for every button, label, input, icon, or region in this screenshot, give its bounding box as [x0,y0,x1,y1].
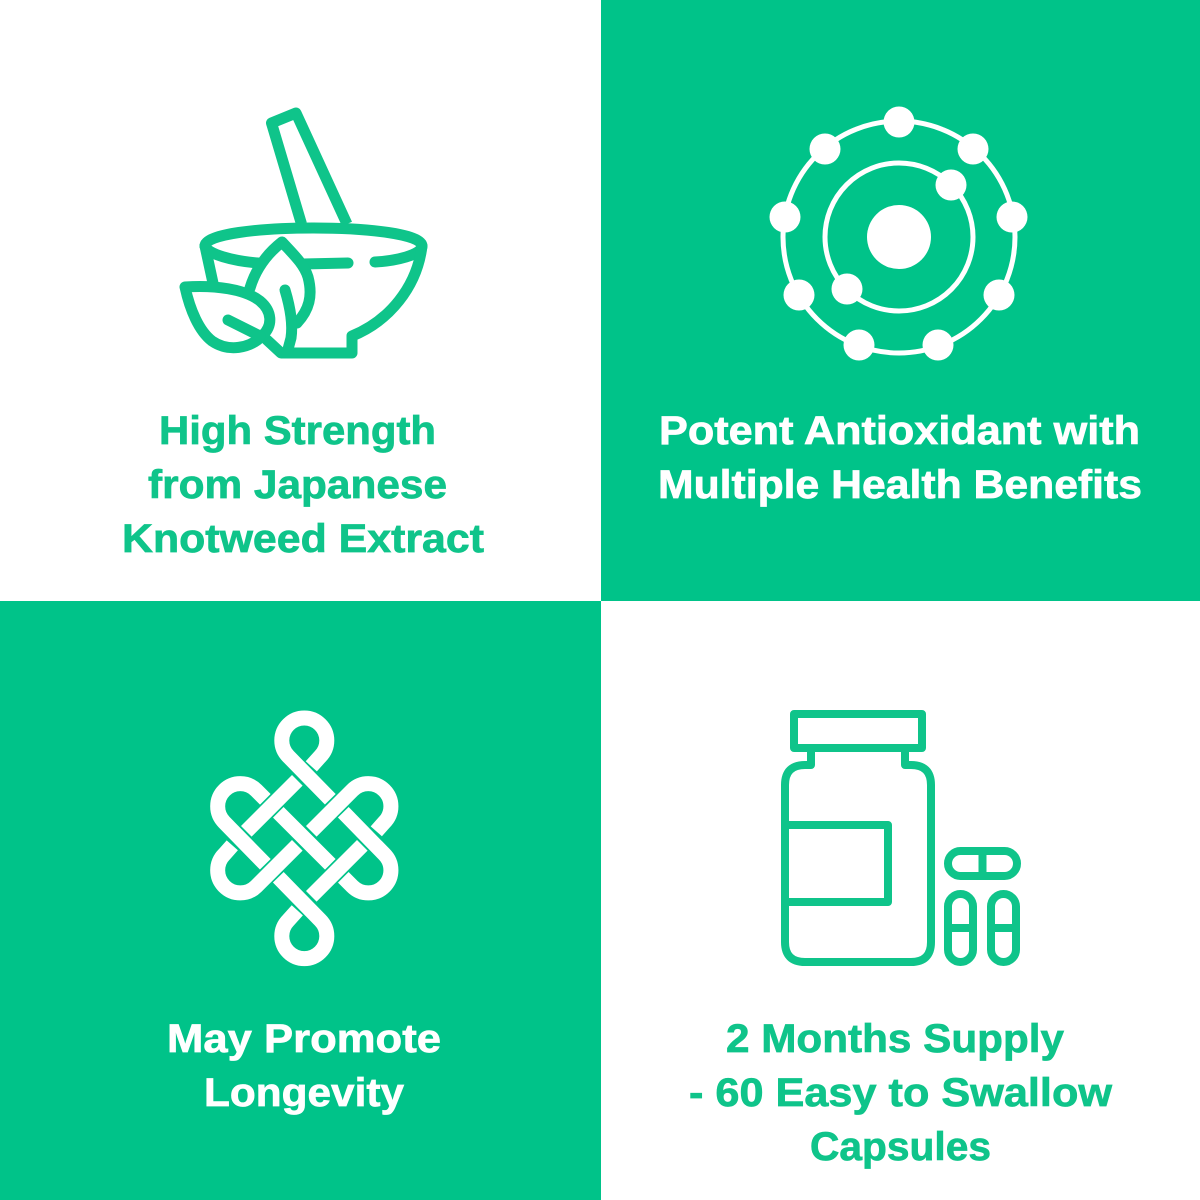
heading: supply [689,1017,1113,1169]
heading: longevity [167,1017,441,1115]
icon: bottle and capsules [785,714,1017,962]
heading: high strength [122,409,484,561]
icon: mortar, pestle and leaves [185,113,422,353]
heading: antioxidant: Multiple Health Benefits [658,463,1142,507]
panel: high strength [0,0,601,601]
heading: antioxidant [658,409,1142,507]
icon: atom [770,106,1028,360]
icon: endless knot [218,718,391,959]
heading: antioxidant: Potent Antioxidant with [659,409,1140,453]
panel: supply [601,601,1200,1200]
heading: supply: 2 Months Supply [726,1017,1065,1061]
heading: high strength: Knotweed Extract [122,517,484,561]
panel: longevity [0,601,601,1200]
heading: supply: - 60 Easy to Swallow [689,1071,1113,1115]
heading: longevity: May Promote [167,1017,441,1061]
heading: high strength: High Strength [159,409,436,453]
heading: longevity: Longevity [204,1071,405,1115]
heading: high strength: from Japanese [148,463,447,507]
heading: supply: Capsules [810,1125,991,1169]
panel: antioxidant [601,0,1200,601]
